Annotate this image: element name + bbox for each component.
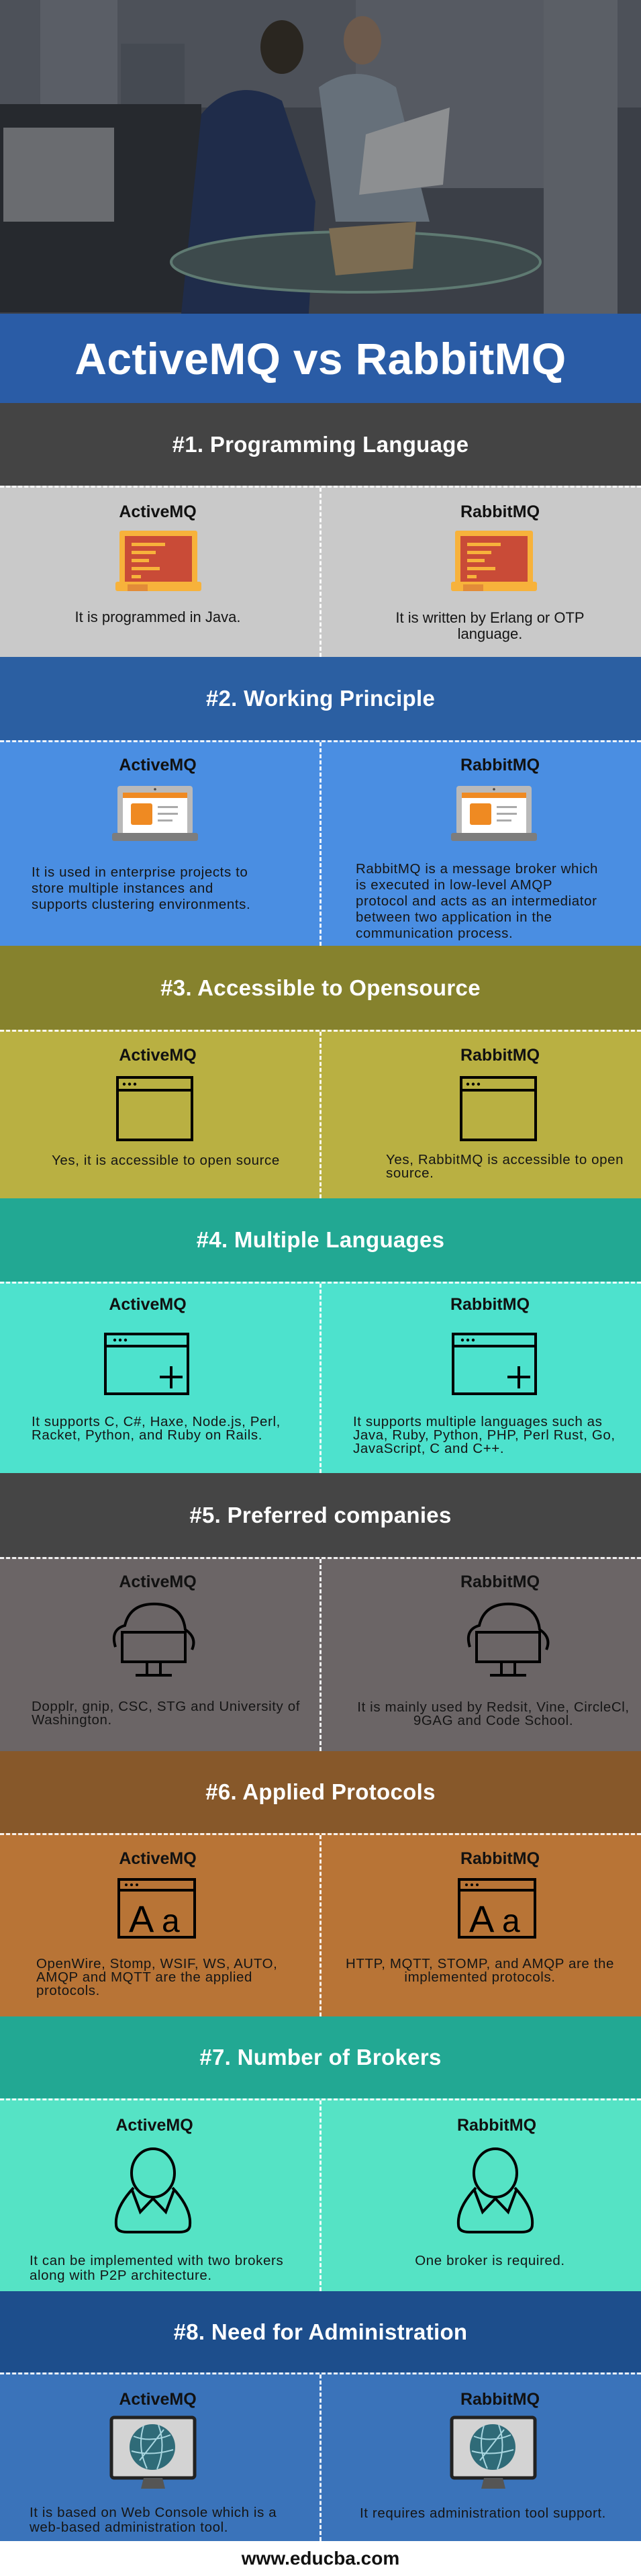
icon: font window left: A: [129, 1898, 154, 1940]
heading right: RabbitMQ: [457, 2116, 536, 2135]
text right: [386, 1152, 624, 1181]
section 2 header: [0, 657, 641, 740]
title: ActiveMQ vs RabbitMQ: [75, 333, 566, 383]
text left: It can be implemented with two brokers: [30, 2253, 283, 2268]
section 8 header: #8. Need for Administration: [174, 2319, 467, 2344]
icon: font window left: [117, 1878, 196, 1940]
section 5 header: #5. Preferred companies: [189, 1502, 452, 1527]
heading right: RabbitMQ: [460, 2390, 540, 2409]
section 7 header: [0, 2016, 641, 2098]
icon: window plus right: [452, 1333, 537, 1395]
text left: It is programmed in Java.: [75, 609, 240, 625]
text left: store multiple instances and: [32, 881, 213, 896]
section 6 header: [0, 1751, 641, 1833]
panel: section 4: [0, 1282, 641, 1473]
text left: supports clustering environments.: [32, 897, 250, 912]
text right: [356, 861, 598, 941]
icon: font window right: a: [502, 1904, 520, 1939]
text left: It is based on Web Console which is a: [30, 2505, 277, 2520]
text right: language.: [458, 625, 522, 642]
icon: person right: [456, 2147, 534, 2233]
heading right: RabbitMQ: [460, 1572, 540, 1591]
icon: laptop web right: [451, 786, 537, 841]
text left: Dopplr, gnip, CSC, STG and University of: [32, 1699, 300, 1714]
heading right: RabbitMQ: [460, 1849, 540, 1868]
text left: OpenWire, Stomp, WSIF, WS, AUTO,: [36, 1956, 277, 1971]
section 3 header: [0, 946, 641, 1030]
text right: It is mainly used by Redsit, Vine, CircleCl,: [357, 1699, 630, 1715]
icon: font window right: [458, 1878, 536, 1940]
section 1 header: #1. Programming Language: [172, 431, 469, 457]
icon: monitor globe right: [450, 2415, 537, 2489]
text right: [395, 609, 585, 642]
section 2 header: #2. Working Principle: [206, 686, 435, 711]
panel: section 5: [0, 1557, 641, 1751]
text left: Washington.: [32, 1712, 112, 1728]
text right: [346, 1956, 614, 1985]
heading right: RabbitMQ: [460, 756, 540, 774]
heading right: RabbitMQ: [460, 1046, 540, 1065]
text right: Yes, RabbitMQ is accessible to open: [386, 1152, 624, 1167]
title: [0, 314, 641, 403]
text right: source.: [386, 1165, 434, 1181]
text right: It requires administration tool support.: [360, 2505, 606, 2521]
heading left: ActiveMQ: [115, 2116, 193, 2135]
text left: [30, 2505, 277, 2535]
text right: 9GAG and Code School.: [413, 1713, 573, 1728]
text left: Yes, it is accessible to open source: [52, 1153, 280, 1168]
heading left: ActiveMQ: [119, 1572, 197, 1591]
heading right: RabbitMQ: [450, 1295, 530, 1314]
text right: between two application in the: [356, 909, 552, 925]
icon: window left: [116, 1076, 193, 1141]
text right: Java, Ruby, Python, PHP, Perl Rust, Go,: [353, 1427, 615, 1443]
text right: implemented protocols.: [404, 1969, 556, 1985]
text left: along with P2P architecture.: [30, 2268, 212, 2283]
icon: font window right: A: [469, 1898, 495, 1940]
text right: [353, 1414, 615, 1456]
section 6 header: #6. Applied Protocols: [205, 1779, 436, 1804]
panel: section 8: [0, 2372, 641, 2541]
text left: [32, 864, 250, 912]
text left: [32, 1414, 281, 1443]
panel: section 6: [0, 1833, 641, 2016]
text left: Racket, Python, and Ruby on Rails.: [32, 1427, 262, 1443]
panel: section 3: [0, 1030, 641, 1198]
header photo: [0, 0, 641, 314]
heading left: ActiveMQ: [119, 502, 197, 521]
text right: protocol and acts as an intermediator: [356, 893, 597, 909]
text left: [32, 1699, 300, 1728]
text left: It supports C, C#, Haxe, Node.js, Perl,: [32, 1414, 281, 1429]
panel: section 7: [0, 2098, 641, 2291]
panel: section 1: [0, 486, 641, 657]
text left: protocols.: [36, 1983, 100, 1998]
section 7 header: #7. Number of Brokers: [199, 2045, 442, 2070]
heading left: ActiveMQ: [119, 1849, 197, 1868]
icon: monitor globe left: [110, 2415, 196, 2489]
section 1 header: [0, 403, 641, 486]
section 4 header: [0, 1198, 641, 1282]
icon: person left: [114, 2147, 192, 2233]
text left: [36, 1956, 277, 1998]
section 5 header: [0, 1473, 641, 1557]
text right: It is written by Erlang or OTP: [395, 609, 585, 626]
panel: section 2: [0, 740, 641, 946]
text left: It is used in enterprise projects to: [32, 864, 248, 880]
heading left: ActiveMQ: [109, 1295, 187, 1314]
heading left: ActiveMQ: [119, 1046, 197, 1065]
text right: JavaScript, C and C++.: [353, 1441, 504, 1456]
icon: laptop code left: [115, 531, 201, 591]
icon: window plus left: [104, 1333, 189, 1395]
icon: window right: [460, 1076, 537, 1141]
text right: RabbitMQ is a message broker which: [356, 861, 598, 877]
heading left: ActiveMQ: [119, 2390, 197, 2409]
icon: font window left: a: [162, 1904, 180, 1939]
icon: cloud monitor left: [113, 1603, 195, 1677]
heading right: RabbitMQ: [460, 502, 540, 521]
text left: AMQP and MQTT are the applied: [36, 1969, 252, 1985]
text left: [30, 2253, 283, 2283]
text right: [357, 1699, 630, 1728]
text right: is executed in low-level AMQP: [356, 877, 552, 893]
text right: HTTP, MQTT, STOMP, and AMQP are the: [346, 1956, 614, 1971]
icon: laptop web left: [112, 786, 198, 841]
section 8 header: [0, 2291, 641, 2372]
icon: cloud monitor right: [467, 1603, 549, 1677]
section 4 header: #4. Multiple Languages: [197, 1227, 444, 1252]
text right: One broker is required.: [415, 2253, 565, 2268]
icon: laptop code right: [451, 531, 537, 591]
section 3 header: #3. Accessible to Opensource: [160, 975, 481, 1000]
text left: web-based administration tool.: [30, 2520, 228, 2535]
footer url: www.educba.com: [242, 2548, 399, 2569]
text right: communication process.: [356, 926, 513, 941]
text right: It supports multiple languages such as: [353, 1414, 603, 1429]
heading left: ActiveMQ: [119, 756, 197, 774]
